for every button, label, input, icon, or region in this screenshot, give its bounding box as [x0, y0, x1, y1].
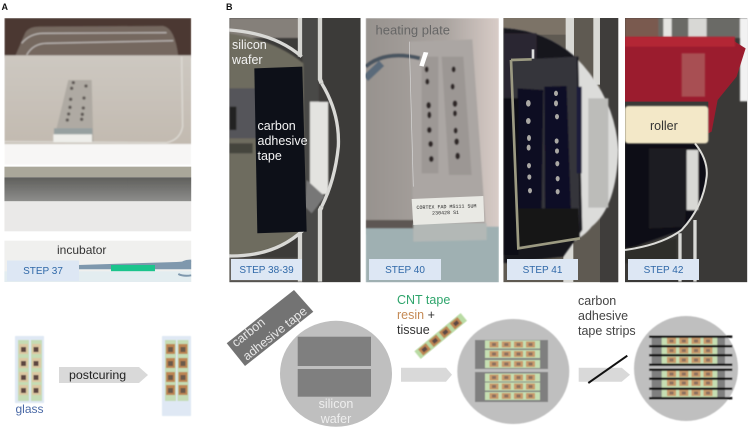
label: incubator: incubator — [57, 243, 106, 257]
arrow: postcuring: postcuring — [69, 368, 126, 382]
arrow: postcuring — [59, 367, 148, 383]
label: roller: roller — [650, 119, 678, 133]
label: step 41: STEP 41 — [523, 265, 563, 276]
arrow: strips to final wafer — [579, 368, 630, 382]
photo: silicon wafer with carbon tape, steps 38-39 — [229, 18, 361, 282]
diagram: glass slide before postcuring — [15, 336, 44, 416]
label: step 42 — [628, 259, 699, 280]
label: CNT tape, resin and tissue: tissue — [397, 323, 430, 337]
photo: roller on wafer, step 42 — [625, 18, 749, 282]
label: slide code: 230428 S1 — [432, 210, 459, 217]
label: carbon adhesive tape: carbon — [258, 119, 296, 133]
label: CNT tape, resin and tissue: + — [424, 308, 435, 322]
label: heating plate: heating plate — [376, 22, 450, 38]
icon: CNT strip with resin squares — [414, 313, 467, 359]
label: CNT tape, resin and tissue: resin — [397, 308, 424, 322]
diagram: wafer with strips and black bars — [634, 316, 738, 421]
label: panel B: B — [226, 2, 233, 12]
label: slide code: CORTEX FAD MS111 5UM — [416, 203, 477, 211]
diagram: silicon wafer with tape — [280, 321, 392, 427]
label: silicon wafer: wafer — [231, 53, 263, 67]
label: step 41 — [507, 259, 578, 280]
photo: tray in incubator, step 37 — [4, 18, 191, 282]
label: carbon adhesive tape: adhesive — [258, 134, 308, 148]
label: carbon adhesive tape: tape — [258, 149, 282, 163]
photo: glass slide on heating plate, step 40 — [366, 18, 499, 283]
label: step 40: STEP 40 — [385, 265, 425, 276]
label: panel A: A — [2, 2, 8, 12]
icon: black tape strip — [588, 356, 627, 383]
label: glass: glass — [16, 402, 44, 416]
label: CNT tape, resin and tissue: CNT tape — [397, 293, 450, 307]
carbon adhesive tape piece — [227, 290, 313, 366]
label: carbon adhesive tape strips: tape strips — [578, 324, 636, 338]
label: silicon wafer: silicon — [232, 38, 267, 52]
label: step 42: STEP 42 — [644, 265, 684, 276]
diagram: glass slide after postcuring — [162, 336, 191, 416]
label: carbon adhesive tape strips: adhesive — [578, 309, 628, 323]
label: step 40 — [369, 259, 441, 280]
diagram: wafer with CNT strips — [457, 319, 569, 424]
diagram: silicon wafer with tape: wafer — [320, 412, 351, 426]
label: step 37 — [7, 260, 79, 281]
carbon adhesive tape piece: carbon — [229, 315, 268, 350]
carbon adhesive tape piece: adhesive tape — [240, 304, 310, 363]
diagram: silicon wafer with tape: silicon — [319, 397, 353, 411]
arrow: wafer to strips — [401, 368, 452, 382]
label: step 38-39: STEP 38-39 — [239, 265, 294, 276]
photo: CNT strips on wafer, step 41 — [503, 18, 618, 282]
label: step 37: STEP 37 — [23, 266, 63, 277]
label: carbon adhesive tape strips: carbon — [578, 294, 616, 308]
label: step 38-39 — [231, 259, 302, 280]
